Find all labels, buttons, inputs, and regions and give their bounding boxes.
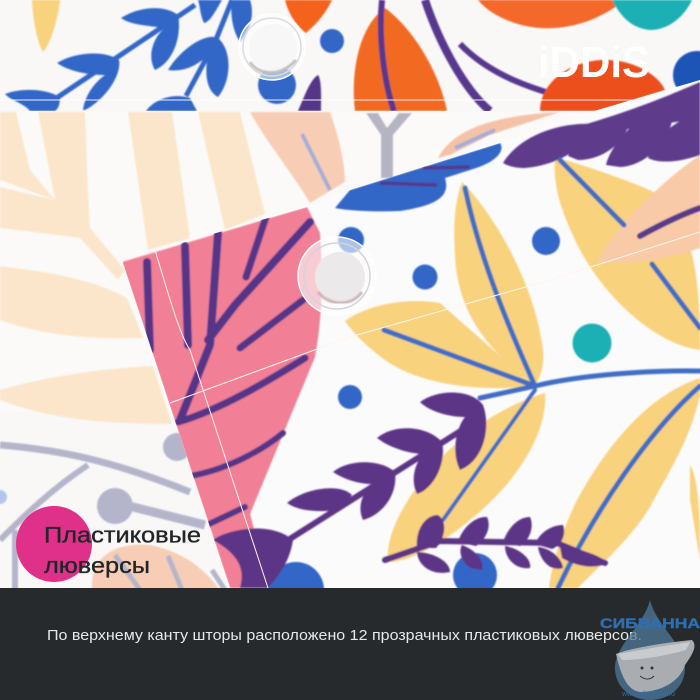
- icon: watermark СИБВАННА: www.sibvanna.ru: [621, 691, 675, 698]
- peach leaf: [597, 155, 700, 263]
- blue leaf: [335, 143, 501, 211]
- text block: description: По верхнему канту шторы расположено 12 прозрачных пластиковых люверсов.: [47, 627, 642, 644]
- orange leaf: [354, 8, 447, 111]
- panel: folded flap: [122, 80, 700, 588]
- purple lower-left branch: [213, 393, 486, 588]
- teal shape: [612, 0, 692, 30]
- purple lower branch: [385, 515, 607, 573]
- icon: grommet top: [239, 14, 305, 80]
- heading: Пластиковые люверсы: люверсы: [44, 553, 150, 578]
- icon: watermark СИБВАННА: [600, 600, 700, 700]
- seams: [155, 250, 268, 588]
- pink leaf: [122, 207, 322, 588]
- red orange shape: [540, 60, 665, 111]
- icon: yellow leaf top left: [32, 0, 60, 52]
- purple branch top right: [503, 82, 700, 168]
- yellow leaves: [345, 157, 700, 588]
- panel: dark footer: [0, 588, 700, 700]
- panel: faded lower curtain layer: [0, 112, 559, 588]
- big orange shape: [478, 0, 625, 28]
- heading: Пластиковые люверсы: [44, 522, 201, 578]
- icon: watermark СИБВАННА: СИБВАННА: [600, 615, 700, 631]
- heading: Пластиковые люверсы: Пластиковые: [44, 522, 201, 548]
- dots: [412, 264, 438, 290]
- callout: pink circle: [16, 506, 92, 582]
- icon: grommet flap: [298, 237, 376, 315]
- blue branch left: [5, 0, 344, 111]
- panel: top hem: [0, 0, 700, 111]
- blue shape right: [672, 50, 700, 88]
- blue stems: [384, 160, 700, 588]
- logo: iDDiS: iDDiS: [538, 38, 650, 87]
